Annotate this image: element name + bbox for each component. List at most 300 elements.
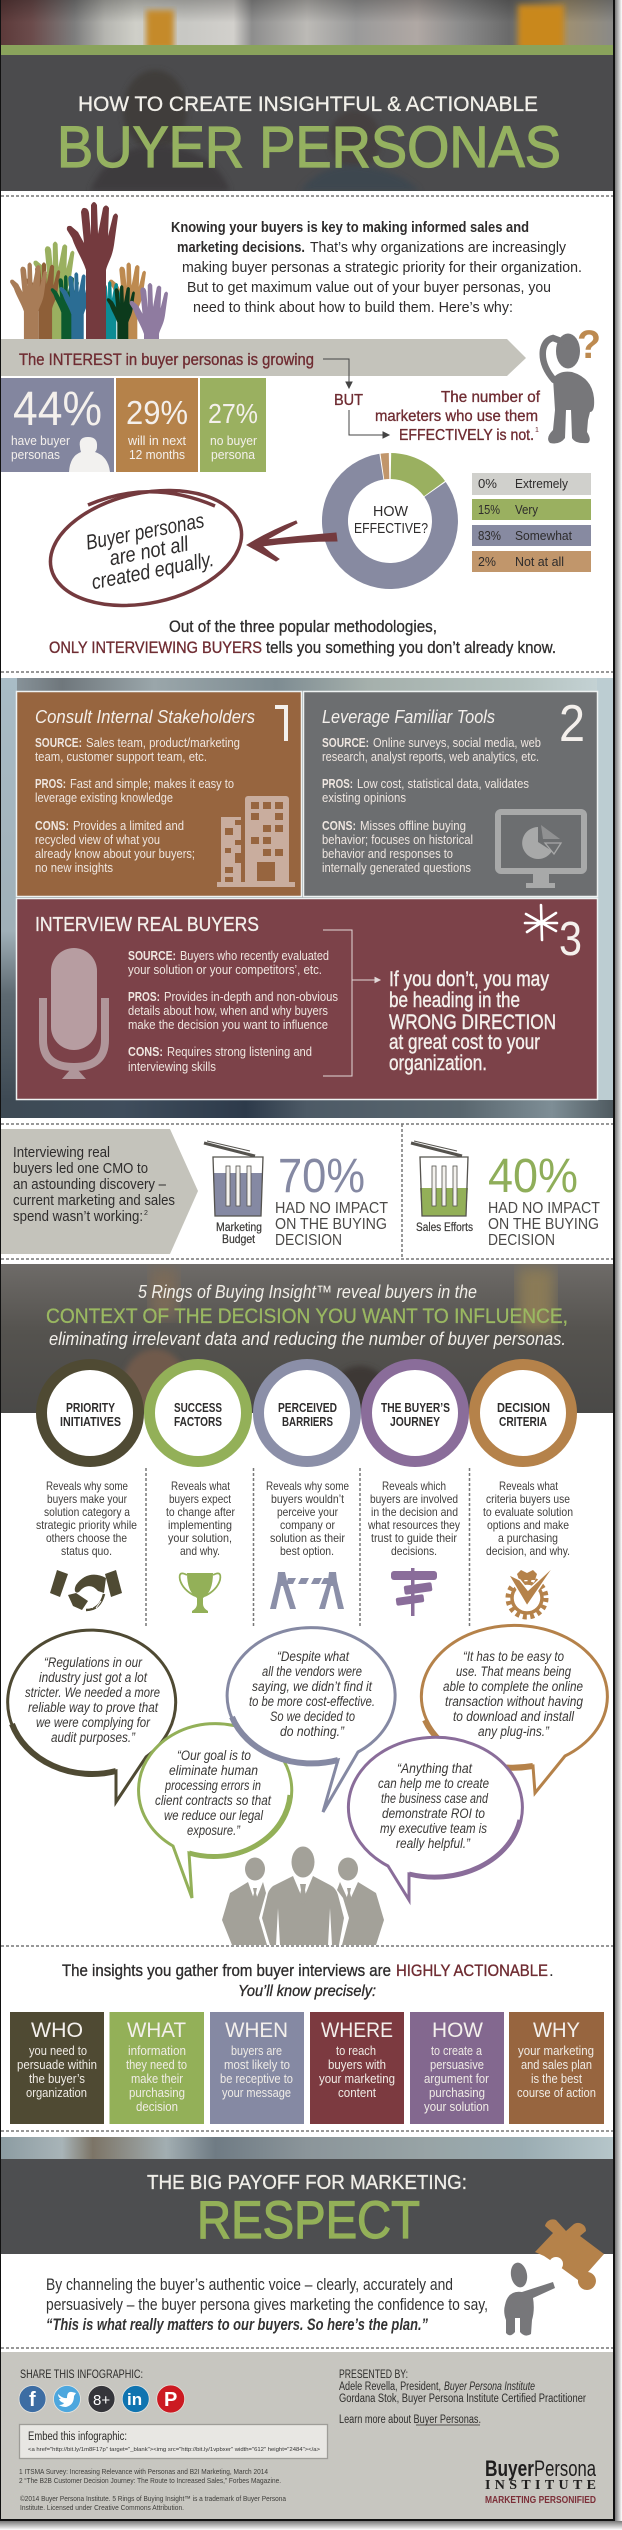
intro text: making buyer personas a strategic priority for their organization.	[182, 259, 582, 276]
speech bubble: ROI quote: really helpful.”	[396, 1836, 470, 1851]
icon: marketing budget trash can	[204, 1141, 263, 1246]
stat: 27 percent: persona	[211, 447, 256, 462]
header photo strip	[1, 0, 613, 45]
column text: perceived barriers: company or	[280, 1518, 335, 1532]
legend: effectiveness: 83%	[478, 528, 501, 543]
stat: 44 percent: have buyer	[11, 433, 71, 448]
column text: priority initiatives: status quo.	[61, 1544, 112, 1558]
panel: interview real buyers	[16, 898, 598, 1100]
stat: 40 percent: DECISION	[488, 1232, 555, 1249]
legend: effectiveness: 15%	[478, 502, 500, 517]
speech bubble: human errors quote: processing errors in	[164, 1778, 261, 1793]
ring: the buyer's journey: THE BUYER’S	[381, 1400, 450, 1415]
card: where: WHERE	[321, 2019, 393, 2042]
stat: 44 percent	[1, 378, 114, 472]
donut label: HOW	[373, 503, 409, 520]
icon: linkedin	[122, 2386, 149, 2412]
legend: effectiveness: Somewhat	[515, 528, 572, 543]
ring: success factors: SUCCESS	[174, 1400, 222, 1415]
speech bubble: easy to use quote: “It has to be easy to	[463, 1649, 564, 1664]
wrong direction warning: at great cost to your	[389, 1031, 540, 1054]
embed box: Embed this infographic:	[28, 2431, 127, 2443]
panel body text: existing opinions	[322, 791, 406, 805]
speech bubble: human errors quote: “Our goal is to	[177, 1748, 251, 1763]
panel body text	[35, 736, 240, 875]
column text: decision criteria: decision, and why.	[486, 1544, 570, 1558]
icon: pinterest: P	[164, 2389, 177, 2411]
methodologies statement: Out of the three popular methodologies,	[169, 617, 437, 636]
speech bubble: vendors quote: So we decided to	[270, 1709, 355, 1724]
intro text: Knowing your buyers is key to making informed sales and	[171, 219, 529, 236]
ring: priority initiatives: PRIORITY	[66, 1400, 115, 1415]
wrong direction warning: organization.	[389, 1052, 487, 1075]
speech bubble: easy to use quote: use. That means being	[456, 1664, 571, 1679]
icon: google plus: 8+	[93, 2392, 110, 2409]
ring: priority initiatives	[42, 1364, 138, 1462]
panel body text: PROS:	[322, 777, 353, 791]
header banner	[1, 55, 613, 191]
effectiveness statement: marketers who use them	[375, 408, 538, 425]
stat: 70 percent	[275, 1150, 388, 1249]
icon: puzzle piece	[535, 2219, 604, 2290]
stat: 29 percent: 29%	[126, 394, 188, 431]
column text: the buyer's journey: Reveals which	[382, 1479, 446, 1493]
intro text	[171, 219, 582, 316]
column text: success factors: buyers expect	[169, 1492, 232, 1506]
card: why: is the best	[531, 2071, 582, 2086]
effectiveness statement: EFFECTIVELY is not.	[399, 427, 534, 444]
column text: the buyer's journey: what resources they	[367, 1518, 460, 1532]
presented by: Buyer Persona Institute	[444, 2381, 535, 2393]
card: when	[210, 2012, 304, 2124]
speech bubble: ROI quote: demonstrate ROI to	[382, 1806, 485, 1821]
column text: decision criteria	[483, 1479, 573, 1558]
icon: facebook: f	[29, 2389, 36, 2411]
icon: microphone	[43, 948, 105, 1079]
wrong direction warning	[389, 968, 556, 1075]
column text: priority initiatives: buyers make your	[47, 1492, 127, 1506]
asterisk three	[525, 905, 582, 966]
column text: perceived barriers: best option.	[280, 1544, 334, 1558]
methodology photo background	[1, 678, 613, 1118]
card: how: purchasing	[429, 2085, 485, 2100]
panel body text: leverage existing knowledge	[35, 791, 173, 805]
legend: effectiveness: 2%	[478, 554, 496, 569]
speech bubble: regulations quote: we were complying for	[36, 1715, 150, 1730]
footnotes: 1 ITSMA Survey: Increasing Relevance with Personas and B2I Marketing, March 2014	[19, 2467, 268, 2476]
card: where: content	[338, 2085, 376, 2100]
card: when: most likely to	[224, 2057, 290, 2072]
card: who: you need to	[29, 2043, 87, 2058]
panel body text: behavior; focuses on historical	[322, 833, 473, 847]
panel body text: PROS:	[128, 990, 160, 1004]
card: where	[310, 2012, 404, 2124]
presented by: Learn more about Buyer Personas.	[339, 2414, 481, 2426]
number 2: 2	[559, 695, 585, 753]
panel body text: recycled view of what you	[35, 833, 160, 847]
speech bubble: human errors quote: exposure.”	[187, 1823, 240, 1838]
presented by: PRESENTED BY:	[339, 2369, 408, 2381]
actionable heading: The insights you gather from buyer interviews are	[62, 1961, 391, 1980]
panel body text: team, customer support team, etc.	[35, 750, 207, 764]
card: who: WHO	[31, 2019, 83, 2042]
card: what: decision	[136, 2099, 178, 2114]
card: what: make their	[131, 2071, 184, 2086]
callout: astounding discovery: buyers led one CMO to	[13, 1160, 148, 1177]
panel body text: SOURCE:	[322, 736, 369, 750]
column text: priority initiatives: solution category a	[44, 1505, 130, 1519]
stat: 40 percent	[488, 1150, 600, 1249]
icon: person holding puzzle	[504, 2261, 555, 2336]
panel body text: SOURCE:	[35, 736, 82, 750]
icon: google plus	[88, 2386, 115, 2412]
speech bubble: ROI quote: can help me to create	[378, 1776, 489, 1791]
panel body text: internally generated questions	[322, 861, 471, 875]
card: where: your marketing	[319, 2071, 395, 2086]
panel body text: Provides in-depth and non-obvious	[164, 990, 338, 1004]
icon: handshake	[50, 1570, 122, 1610]
legend: effectiveness	[472, 473, 591, 572]
panel body text: research, analyst reports, web analytics, etc.	[322, 750, 539, 764]
panel body text: Buyers who recently evaluated	[180, 949, 329, 963]
card: where: buyers with	[328, 2057, 386, 2072]
ring: success factors: FACTORS	[174, 1414, 222, 1429]
payoff text	[46, 2275, 488, 2334]
callout: circled statement: are not all	[107, 532, 191, 570]
panel body text: Requires strong listening and	[167, 1045, 312, 1059]
column text: success factors: Reveals what	[171, 1479, 231, 1493]
panel heading: Consult Internal Stakeholders	[35, 707, 255, 727]
donut chart: how effective	[322, 453, 458, 589]
icon: signpost	[391, 1568, 437, 1616]
icon: thinking person	[543, 323, 601, 443]
column text: success factors: your solution,	[168, 1531, 232, 1545]
column text: success factors: implementing	[168, 1518, 232, 1532]
panel body text: CONS:	[35, 819, 69, 833]
presented by: Adele Revella, President,	[339, 2381, 441, 2393]
legend: effectiveness: Not at all	[515, 554, 564, 569]
column text: decision criteria: options and make	[487, 1518, 569, 1532]
footnotes: Institute. Licensed under Creative Commons Attribution.	[20, 2503, 184, 2512]
column text: perceived barriers: perceive your	[277, 1505, 338, 1519]
speech bubble: ROI quote: “Anything that	[397, 1761, 473, 1776]
stat: 44 percent: 44%	[13, 383, 102, 436]
panel heading: INTERVIEW REAL BUYERS	[35, 914, 259, 936]
card: what: they need to	[126, 2057, 187, 2072]
ring: decision criteria: CRITERIA	[499, 1414, 547, 1429]
panel body text: interviewing skills	[128, 1060, 216, 1074]
column text: priority initiatives: strategic priority while	[36, 1518, 137, 1532]
stat: 70 percent: DECISION	[275, 1232, 342, 1249]
panel body text: Sales team, product/marketing	[86, 736, 240, 750]
stat: 27 percent: no buyer	[210, 433, 258, 448]
card: how	[410, 2012, 504, 2124]
panel heading: Leverage Familiar Tools	[322, 707, 495, 727]
column text: perceived barriers: solution as their	[270, 1531, 345, 1545]
ring: the buyer's journey: JOURNEY	[390, 1414, 440, 1429]
card: how: to create a	[431, 2043, 483, 2058]
stat: 70 percent: 70%	[278, 1150, 365, 1203]
arrow: but to effectiveness	[349, 410, 389, 438]
stat: 70 percent: HAD NO IMPACT	[275, 1200, 388, 1217]
green header bar	[1, 45, 613, 55]
panel body text: Provides a limited and	[73, 819, 184, 833]
banner headline: CONTEXT OF THE DECISION YOU WANT TO INFLUENCE,	[46, 1305, 568, 1328]
callout: astounding discovery: an astounding discovery –	[13, 1176, 167, 1193]
speech bubble: easy to use quote: transaction without having	[445, 1694, 583, 1709]
column text: success factors	[166, 1479, 235, 1558]
speech bubble: regulations quote	[8, 1630, 176, 1802]
card: who	[10, 2012, 104, 2124]
panel body text: SOURCE:	[128, 949, 176, 963]
methodologies statement	[49, 617, 556, 657]
column text: decision criteria: to evaluate solution	[483, 1505, 573, 1519]
panel body text: make the decision you want to influence	[128, 1018, 328, 1032]
card: when: buyers are	[231, 2043, 282, 2058]
wrong direction warning: be heading in the	[389, 989, 520, 1012]
intro text: But to get maximum value out of your buyer personas, you	[187, 279, 551, 296]
speech bubble: ROI quote: my executive team is	[380, 1821, 487, 1836]
card: when: WHEN	[225, 2019, 288, 2042]
wrong direction warning: If you don’t, you may	[389, 968, 549, 991]
question mark: ?	[577, 323, 601, 367]
column text: priority initiatives: others choose the	[46, 1531, 127, 1545]
actionable heading: .	[549, 1961, 554, 1980]
icon: office buildings	[217, 796, 295, 887]
presented by	[339, 2369, 586, 2426]
panel body text: Fast and simple; makes it easy to	[70, 777, 234, 791]
column text: the buyer's journey: trust to guide their	[371, 1531, 457, 1545]
actionable heading: HIGHLY ACTIONABLE	[396, 1961, 548, 1980]
logo: Buyer	[485, 2456, 534, 2481]
icon: sales efforts trash can	[411, 1141, 473, 1234]
ring: decision criteria: DECISION	[497, 1400, 550, 1415]
stat: 40 percent: HAD NO IMPACT	[488, 1200, 600, 1217]
arrow: interest to but	[323, 359, 352, 388]
speech bubble: regulations quote: industry just got a lot	[39, 1670, 148, 1685]
panel body text: your solution or your competitors’, etc.	[128, 963, 322, 977]
embed box	[20, 2424, 328, 2458]
icon: person silhouette	[69, 437, 110, 472]
footer panel	[1, 2352, 613, 2519]
payoff text: By channeling the buyer’s authentic voice – clearly, accurately and	[46, 2275, 453, 2294]
column text: decision criteria: criteria buyers use	[486, 1492, 570, 1506]
panel body text: CONS:	[322, 819, 356, 833]
card: who: organization	[26, 2085, 87, 2100]
speech bubble: human errors quote: client contracts so that	[155, 1793, 272, 1808]
banner closing line: eliminating irrelevant data and reducing the number of buyer personas.	[49, 1329, 566, 1349]
card: what	[110, 2012, 204, 2124]
speech bubble: vendors quote: all the vendors were	[262, 1664, 362, 1679]
number 1	[275, 705, 288, 741]
icon: road barrier	[270, 1572, 344, 1609]
column text: the buyer's journey: decisions.	[391, 1544, 437, 1558]
ring: the buyer's journey	[366, 1364, 464, 1462]
stat: 27 percent: 27%	[208, 398, 258, 429]
stat: 40 percent: 40%	[488, 1150, 578, 1203]
ring: priority initiatives: INITIATIVES	[60, 1414, 121, 1429]
callout: circled statement: created equally.	[90, 548, 216, 594]
legend: effectiveness: Very	[515, 502, 538, 517]
payoff heading: THE BIG PAYOFF FOR MARKETING:	[147, 2172, 467, 2194]
bracket arrow	[323, 930, 380, 1076]
speech bubble: easy to use quote: able to complete the online	[443, 1679, 583, 1694]
column text: perceived barriers	[266, 1479, 349, 1558]
callout: circled statement	[40, 474, 252, 622]
banner text: The INTEREST in buyer personas is growing	[19, 350, 314, 369]
speech bubble: vendors quote: to be more cost-effective.	[249, 1694, 375, 1709]
respect word: RESPECT	[197, 2191, 420, 2250]
panel body text: behavior and responses to	[322, 847, 453, 861]
banner intro line: 5 Rings of Buying Insight™ reveal buyers in the	[138, 1282, 477, 1302]
payoff text: persuasively – the buyer persona gives marketing the confidence to say,	[46, 2295, 488, 2314]
card: what: purchasing	[129, 2085, 185, 2100]
column text: perceived barriers: buyers wouldn’t	[271, 1492, 345, 1506]
interest arrow banner	[1, 339, 526, 376]
logo: Persona	[534, 2456, 597, 2481]
speech bubble: regulations quote: reliable way to prove that	[28, 1700, 159, 1715]
speech bubble: vendors quote: do nothing.”	[280, 1724, 344, 1739]
card: when: your message	[222, 2085, 291, 2100]
stat: 29 percent: will in next	[127, 433, 186, 448]
speech bubble: ROI quote	[348, 1737, 522, 1900]
card: why: course of action	[517, 2085, 596, 2100]
icon: pinterest	[157, 2385, 185, 2413]
title line: HOW TO CREATE INSIGHTFUL & ACTIONABLE	[78, 93, 538, 116]
column text: success factors: to change after	[166, 1505, 235, 1519]
column text: decision criteria: a purchasing	[498, 1531, 558, 1545]
speech bubble: regulations quote: audit purposes.”	[51, 1730, 135, 1745]
stat: 40 percent: ON THE BUYING	[488, 1216, 599, 1233]
panel: leverage familiar tools	[304, 692, 598, 896]
column text: the buyer's journey: in the decision and	[371, 1505, 458, 1519]
methodologies statement: ONLY INTERVIEWING BUYERS	[49, 638, 262, 657]
panel body text: details about how, when and why buyers	[128, 1004, 328, 1018]
speech bubble: easy to use quote	[421, 1625, 607, 1793]
panel body text: Low cost, statistical data, validates	[357, 777, 529, 791]
callout: astounding discovery: current marketing and sales	[13, 1192, 175, 1209]
panel body text: no new insights	[35, 861, 113, 875]
card: how: argument for	[424, 2071, 490, 2086]
payoff photo strip	[1, 2137, 613, 2159]
callout: astounding discovery: 2	[144, 1210, 148, 1217]
ring: perceived barriers: BARRIERS	[282, 1414, 333, 1429]
intro text: That’s why organizations are increasingly	[310, 239, 566, 256]
speech bubble: regulations quote: “Regulations in our	[44, 1655, 142, 1670]
share heading: SHARE THIS INFOGRAPHIC:	[20, 2367, 143, 2381]
speech bubble: human errors quote	[139, 1724, 292, 1898]
panel body text: Online surveys, social media, web	[373, 736, 541, 750]
panel body text: already know about your buyers;	[35, 847, 195, 861]
ring: decision criteria	[474, 1364, 572, 1462]
callout: astounding discovery: spend wasn’t working:	[13, 1208, 143, 1225]
stat: 27 percent	[200, 378, 266, 472]
card: where: to reach	[336, 2043, 376, 2058]
speech bubble: vendors quote: “Despite what	[277, 1649, 350, 1664]
icon: marketing budget trash can: Budget	[222, 1234, 256, 1246]
card: why	[509, 2012, 604, 2124]
footnotes: 2 “The B2B Customer Decision Journey: The Route to Increased Sales,” Forbes Magazine.	[19, 2476, 281, 2485]
stat: 29 percent	[116, 378, 198, 472]
logo	[485, 2456, 597, 2506]
card: how: your solution	[424, 2099, 489, 2114]
speech bubble: easy to use quote: any plug-ins.”	[478, 1724, 549, 1739]
icon: twitter	[54, 2386, 80, 2412]
panel body text: CONS:	[128, 1045, 163, 1059]
actionable heading	[62, 1961, 554, 2000]
speech bubble: human errors quote: we reduce our legal	[164, 1808, 264, 1823]
embed box: <a href="http://bit.ly/1m8F17p" target="_blank"><img src="http://bit.ly/1vpbxer" width="612" height="2484"></a>	[28, 2447, 320, 2453]
icon: facebook	[19, 2386, 46, 2412]
speech bubble: vendors quote	[227, 1628, 395, 1812]
five rings banner	[1, 1264, 613, 1421]
ring: success factors	[150, 1364, 246, 1462]
ring: perceived barriers	[258, 1364, 356, 1462]
panel body text: Misses offline buying	[360, 819, 466, 833]
card: how: persuasive	[430, 2057, 484, 2072]
panel body text: PROS:	[35, 777, 66, 791]
column text: decision criteria: Reveals what	[499, 1479, 559, 1493]
card: who: the buyer’s	[29, 2071, 85, 2086]
icon: monitor with pie chart	[498, 812, 584, 888]
speech bubble: vendors quote: saying, we didn’t find it	[252, 1679, 373, 1694]
icon: three business people	[222, 1846, 384, 1945]
stat: 29 percent: 12 months	[129, 447, 185, 462]
logo: MARKETING PERSONIFIED	[485, 2495, 596, 2506]
effectiveness statement: The number of	[441, 389, 541, 406]
card: what: WHAT	[127, 2019, 186, 2042]
callout: astounding discovery: Interviewing real	[13, 1144, 110, 1161]
icon: raised hands	[10, 202, 168, 339]
panel body text	[322, 736, 541, 875]
callout: circled statement: Buyer personas	[84, 509, 207, 555]
effectiveness statement: 1	[535, 427, 539, 434]
speech bubble: ROI quote: the business case and	[381, 1791, 488, 1806]
ring: perceived barriers: PERCEIVED	[278, 1400, 337, 1415]
callout: astounding discovery	[1, 1129, 198, 1254]
intro text: need to think about how to build them. Here’s why:	[193, 299, 513, 316]
speech bubble: regulations quote: stricter. We needed a more	[25, 1685, 160, 1700]
speech bubble: easy to use quote: to download and install	[453, 1709, 575, 1724]
panel body text	[128, 949, 338, 1074]
actionable heading: You’ll know precisely:	[238, 1983, 376, 2000]
asterisk three: 3	[559, 913, 582, 966]
donut chart: how effective: EFFECTIVE?	[354, 520, 428, 537]
card: how: HOW	[432, 2019, 483, 2042]
icon: trophy	[180, 1573, 220, 1613]
column text: success factors: and why.	[180, 1544, 220, 1558]
payoff banner	[1, 2159, 613, 2254]
wrong direction warning: WRONG DIRECTION	[389, 1011, 556, 1034]
icon caption: Marketing	[216, 1222, 262, 1234]
but label: BUT	[334, 392, 363, 409]
speech bubble: human errors quote: eliminate human	[169, 1763, 258, 1778]
card: who: persuade within	[17, 2057, 97, 2072]
arrow: donut to callout	[247, 521, 337, 561]
legend: effectiveness: 0%	[478, 476, 497, 491]
effectiveness statement	[375, 389, 541, 444]
main title: BUYER PERSONAS	[57, 115, 561, 180]
stat: 44 percent: personas	[11, 447, 60, 462]
intro text: marketing decisions.	[177, 239, 305, 256]
methodologies statement: tells you something you don’t already know.	[266, 638, 556, 657]
stat: 70 percent: ON THE BUYING	[275, 1216, 387, 1233]
card: why: your marketing	[518, 2043, 594, 2058]
column text: priority initiatives	[36, 1479, 137, 1558]
column text: the buyer's journey	[367, 1479, 460, 1558]
footnotes: ©2014 Buyer Persona Institute. 5 Rings of Buying Insight™ is a trademark of Buyer Persona	[20, 2494, 287, 2503]
panel: consult internal stakeholders	[16, 692, 302, 896]
